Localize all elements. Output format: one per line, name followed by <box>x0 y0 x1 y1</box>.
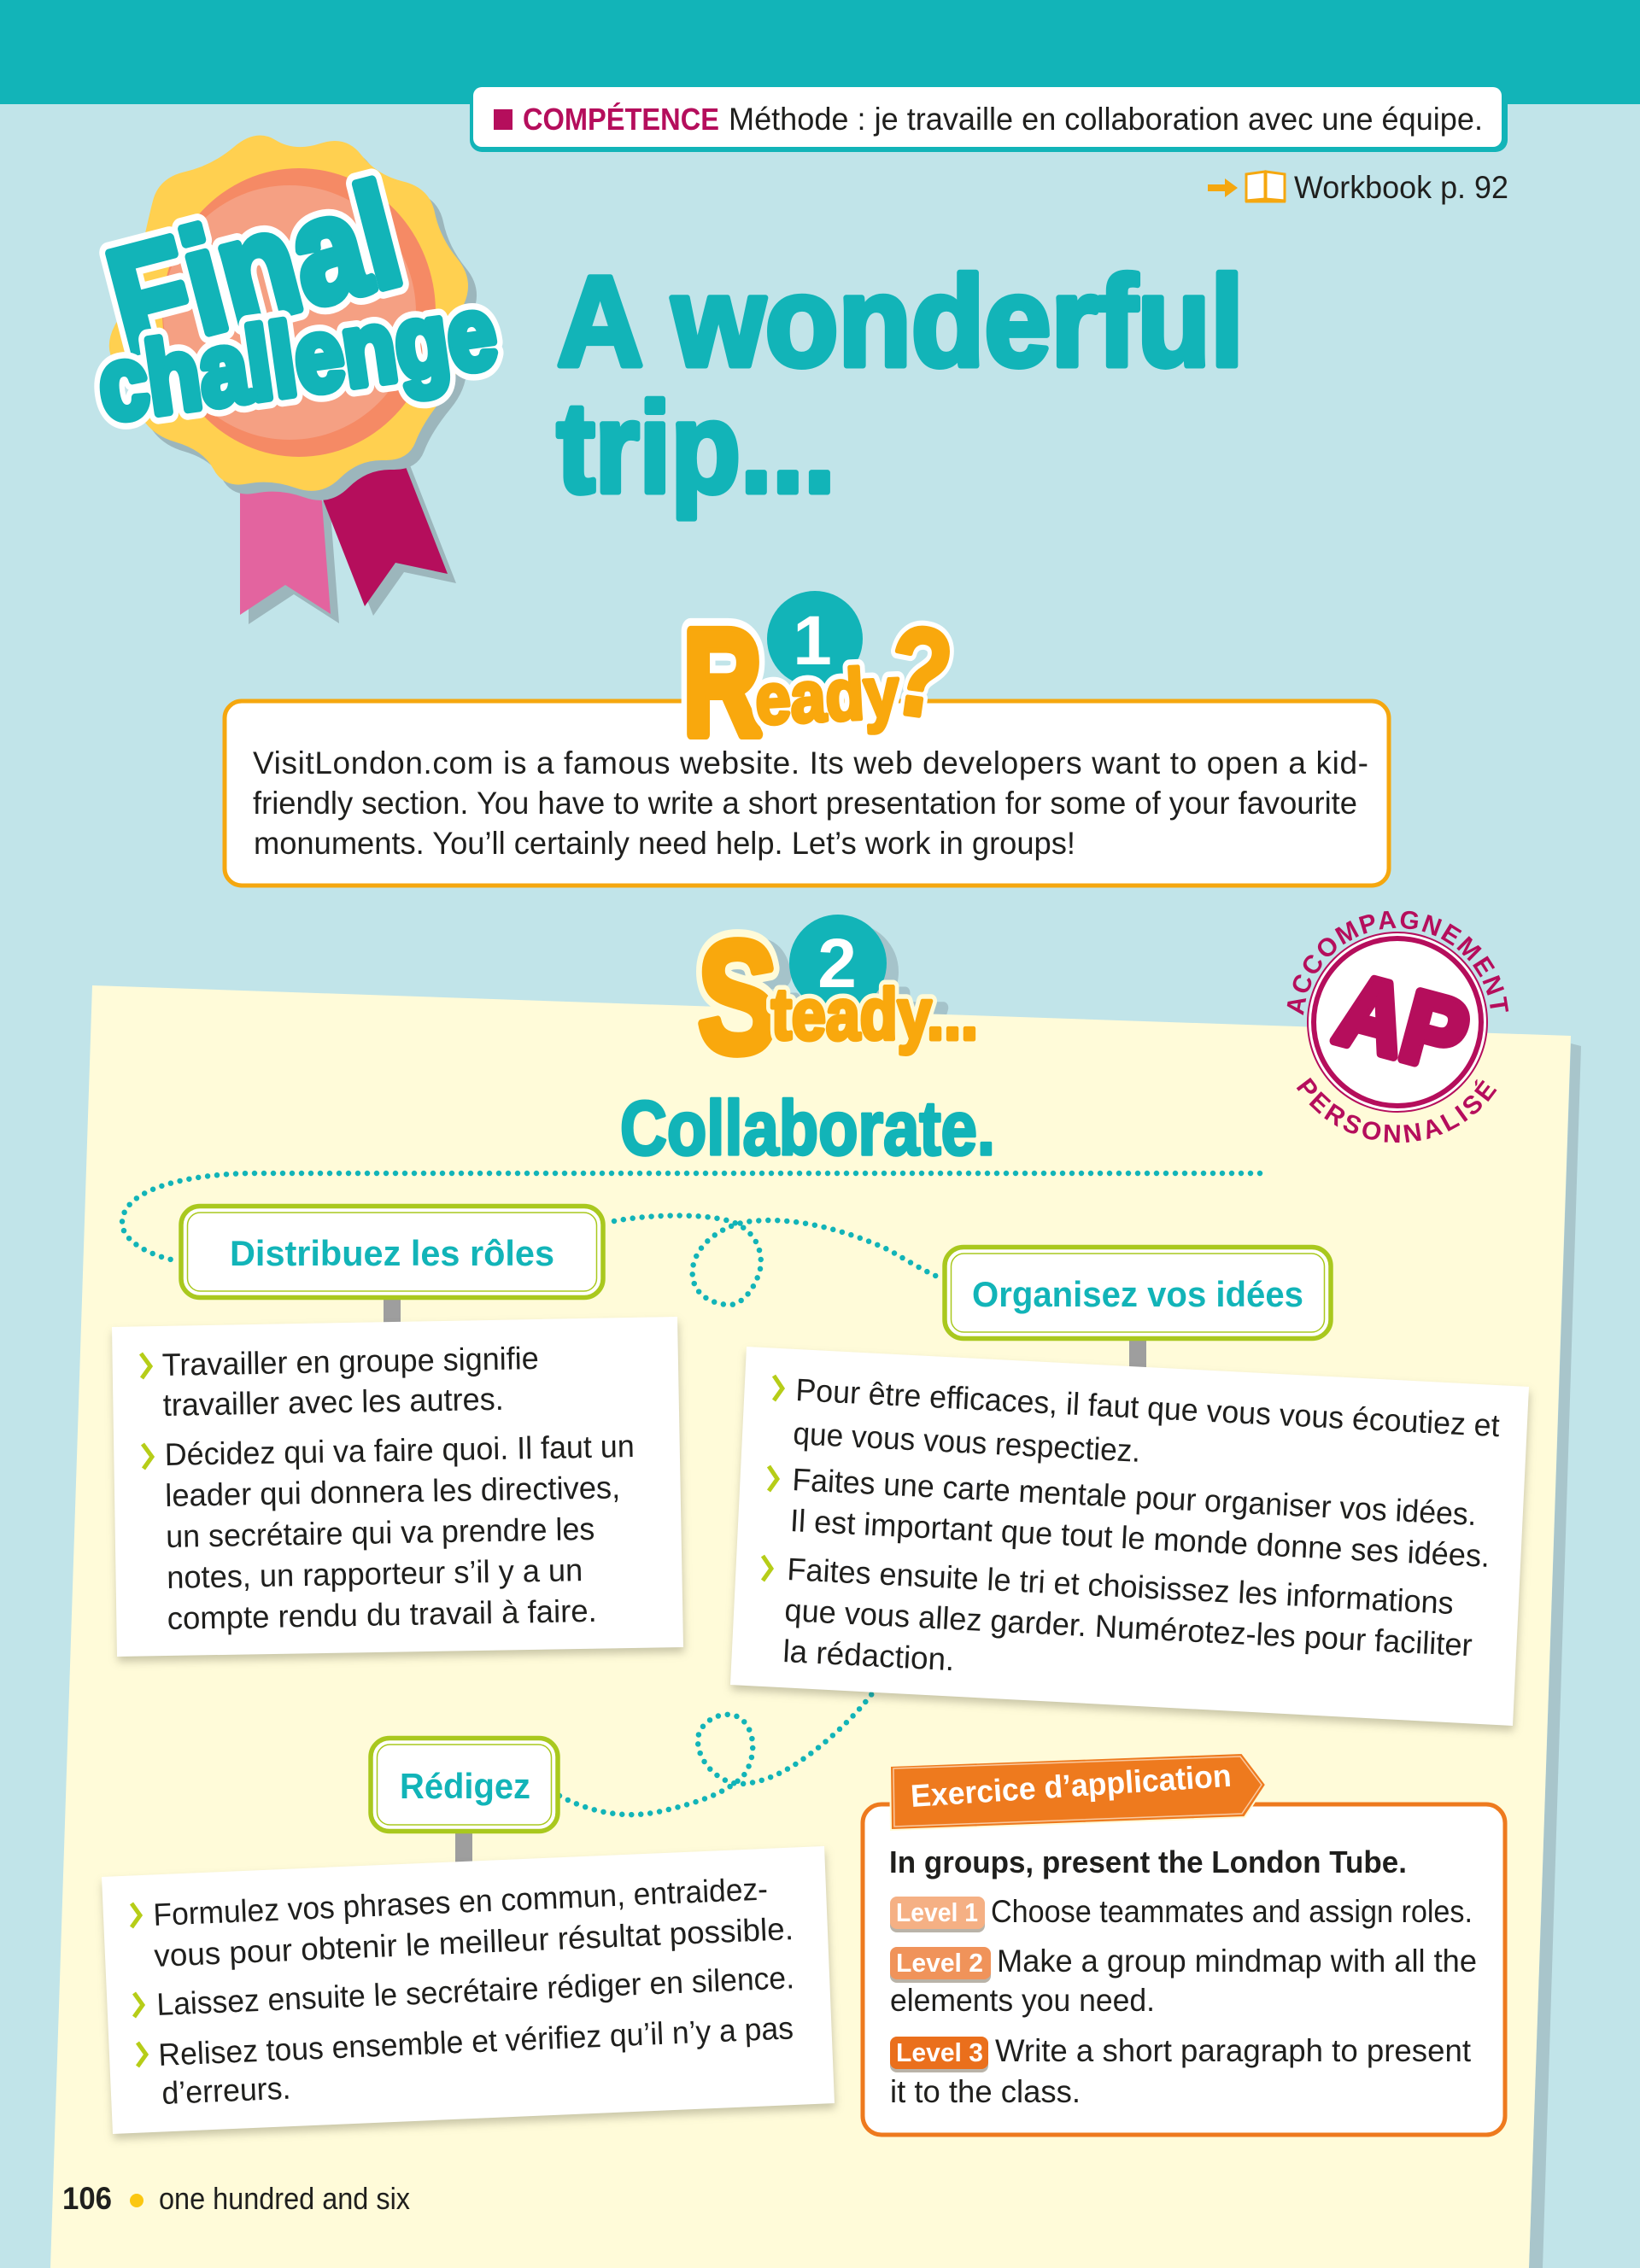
page number footer: one hundred and six <box>159 2181 410 2216</box>
level 2 <box>890 1944 1477 2018</box>
card: Rédigez: d’erreurs. <box>161 2071 291 2111</box>
competence banner: Méthode : je travaille en collaboration avec une équipe. <box>729 102 1483 137</box>
word: challenge: challenge <box>91 274 503 443</box>
card: Rédigez <box>102 1846 835 2134</box>
heading logo: Ready? <box>683 591 960 767</box>
rosette <box>109 136 477 500</box>
panel: ready text box <box>225 701 1389 886</box>
panel: exercice d'application: In groups, present the London Tube. <box>889 1844 1407 1879</box>
card: Rédigez: Laissez ensuite le secrétaire rédiger en silence. <box>156 1960 795 2022</box>
card: Organisez vos idées: Pour être efficaces, il faut que vous vous écoutiez et <box>795 1372 1501 1443</box>
panel: ready text box: monuments. You’ll certainly need help. Let’s work in groups! <box>254 826 1075 861</box>
number circle 1: 1 <box>793 602 832 680</box>
heading logo: Steady...: teady... <box>771 974 978 1055</box>
page number footer: 106 <box>62 2181 112 2216</box>
card: Rédigez: Formulez vos phrases en commun, entraidez- <box>153 1871 769 1932</box>
title: A wonderful <box>557 249 1244 393</box>
word: Final: Final <box>93 153 415 384</box>
heading logo: Ready?: ? <box>881 599 960 746</box>
step: Organisez vos idées: Organisez vos idées <box>972 1274 1303 1314</box>
number circle 2 <box>789 915 887 1012</box>
panel: yellow paper <box>50 985 1581 2268</box>
heading logo: Ready?: eady <box>753 652 901 739</box>
level 1: Level 1 <box>896 1897 978 1927</box>
level 3: it to the class. <box>890 2074 1081 2109</box>
banner: Exercice d'application: Exercice d’application <box>910 1758 1233 1814</box>
card: Distribuez les rôles: leader qui donnera les directives, <box>165 1470 621 1513</box>
card: Rédigez: vous pour obtenir le meilleur résultat possible. <box>154 1911 794 1973</box>
card: Distribuez les rôles: Décidez qui va faire quoi. Il faut un <box>164 1429 635 1472</box>
step: Distribuez les rôles <box>181 1206 603 1336</box>
dotted connector: top line to Distribuez <box>122 1173 1260 1261</box>
title: trip... <box>557 376 835 519</box>
card: Rédigez: Relisez tous ensemble et vérifiez qu’il n’y a pas <box>158 2010 794 2072</box>
step: Distribuez les rôles: Distribuez les rôles <box>230 1233 554 1273</box>
level 2: Level 2 <box>896 1948 983 1978</box>
card: Organisez vos idées: que vous vous respectiez. <box>793 1416 1141 1469</box>
level 3: Level 3 <box>896 2037 983 2067</box>
level 3: Write a short paragraph to present <box>995 2033 1472 2068</box>
card: Organisez vos idées: Faites ensuite le tri et choisissez les informations <box>787 1552 1455 1621</box>
banner: Exercice d'application <box>890 1753 1266 1830</box>
heading logo: Ready?: R <box>683 599 762 767</box>
panel: ready text box: VisitLondon.com is a famous website. Its web developers want to open a kid- <box>253 745 1368 780</box>
competence banner: COMPÉTENCE <box>523 102 719 137</box>
competence banner <box>470 87 1508 152</box>
step: Rédigez <box>371 1739 558 1867</box>
AP badge <box>1286 910 1508 1143</box>
card: Distribuez les rôles: un secrétaire qui va prendre les <box>166 1511 595 1554</box>
heading: Collaborate.: Collaborate. <box>620 1086 995 1172</box>
card: Distribuez les rôles: Travailler en groupe signifie <box>161 1341 539 1382</box>
heading logo: Ready?: ? <box>881 599 960 746</box>
word: challenge: challenge <box>91 274 503 443</box>
workbook reference: Workbook p. 92 <box>1294 170 1508 205</box>
heading logo: Steady... <box>698 908 978 1086</box>
AP badge: ACCOMPAGNEMENT <box>1286 910 1508 1015</box>
card: Distribuez les rôles: travailler avec les autres. <box>162 1382 504 1423</box>
number circle 1 <box>767 591 863 687</box>
level 2: Make a group mindmap with all the <box>997 1944 1477 1979</box>
heading logo: Ready?: eady <box>753 652 901 739</box>
heading logo: Steady...: teady... <box>771 974 978 1055</box>
step: Organisez vos idées <box>945 1247 1331 1380</box>
card: Distribuez les rôles <box>112 1317 683 1657</box>
heading logo: Ready?: R <box>683 599 762 767</box>
card: Organisez vos idées: que vous allez garder. Numérotez-les pour faciliter <box>784 1593 1473 1663</box>
card: Organisez vos idées: la rédaction. <box>782 1634 955 1677</box>
Steady logo shadow: teady... <box>782 980 991 1066</box>
heading logo: Steady...: S <box>698 908 777 1086</box>
card: Organisez vos idées: Faites une carte mentale pour organiser vos idées. <box>792 1462 1478 1532</box>
card: Organisez vos idées: Il est important que tout le monde donne ses idées. <box>789 1503 1491 1574</box>
page number footer <box>62 2181 410 2216</box>
Steady logo shadow: S <box>708 914 790 1097</box>
panel: exercice d'application <box>863 1753 1505 2135</box>
workbook reference <box>1208 170 1508 205</box>
card: Distribuez les rôles: notes, un rapporteur s’il y a un <box>167 1552 583 1595</box>
dotted connector: Organisez to Redigez <box>559 1692 873 1815</box>
title <box>557 249 1244 519</box>
AP badge: AP <box>1326 953 1479 1095</box>
number circle 2: 2 <box>817 925 857 1002</box>
level 3 <box>890 2033 1472 2109</box>
card: Organisez vos idées <box>730 1347 1529 1726</box>
word: Final: Final <box>93 153 415 384</box>
rosette badge: Final challenge <box>91 136 503 624</box>
heading logo: Steady...: S <box>698 908 777 1086</box>
step: Rédigez: Rédigez <box>400 1766 530 1806</box>
dotted connector: Distribuez to Organisez <box>614 1216 940 1305</box>
top band <box>0 0 1640 104</box>
level 1: Choose teammates and assign roles. <box>991 1894 1473 1929</box>
AP badge: PERSONNALISÉ <box>1297 1078 1496 1143</box>
ribbons <box>240 456 456 624</box>
card: Distribuez les rôles: compte rendu du travail à faire. <box>167 1593 597 1636</box>
level 2: elements you need. <box>890 1983 1155 2018</box>
panel: ready text box: friendly section. You have to write a short presentation for some of your favourite <box>253 786 1357 821</box>
Steady logo shadow <box>708 914 991 1097</box>
